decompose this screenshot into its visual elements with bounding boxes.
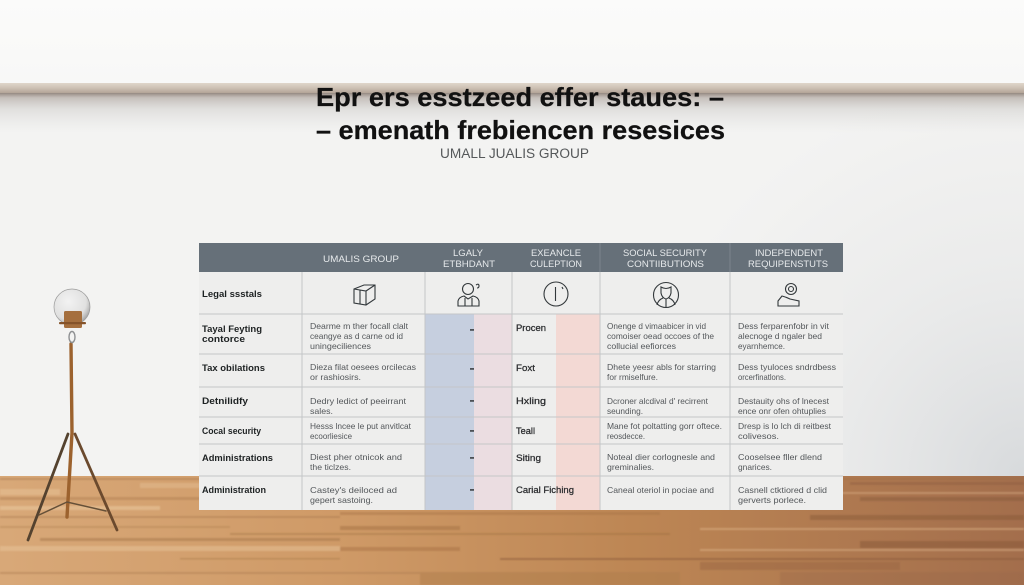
table header band (199, 243, 843, 272)
subtitle: UMALL JUALIS GROUP (440, 146, 589, 161)
row labels: Tayal Feyting (202, 324, 262, 335)
column: independent requirements: eyarnhemce. (738, 341, 785, 351)
row labels: Detnilidfy (202, 396, 249, 407)
column: independent requirements: alecnoge d ngaler bed (738, 331, 822, 341)
column: independent requirements (738, 321, 836, 505)
ledge on wall (0, 83, 1024, 133)
column: social security: collucial eefiorces (607, 341, 676, 351)
column: short labels: Carial Fiching (516, 485, 574, 495)
lamp legs (28, 344, 117, 540)
column: independent requirements: gerverts porlece. (738, 495, 806, 505)
legal status highlighted columns (425, 314, 600, 510)
column: umalis group: Castey's deiloced ad (310, 485, 397, 495)
column: social security: Dhete yeesr abls for starring (607, 362, 716, 372)
column: social security: greminalies. (607, 462, 654, 472)
column: umalis group: Diest pher otnicok and (310, 452, 402, 462)
column: social security (607, 321, 722, 495)
header labels: UMALIS GROUP (323, 254, 399, 264)
column: independent requirements: Dresp is lo lch di reitbest (738, 421, 832, 431)
header labels: EXEANCLE (531, 248, 581, 258)
grid lines (199, 243, 843, 510)
row labels: contorce (202, 334, 245, 345)
title (316, 82, 725, 145)
lamp hook (69, 332, 75, 342)
column: social security: for rmiselfure. (607, 372, 658, 382)
icon: coin over hand (778, 284, 799, 306)
row labels (202, 289, 273, 496)
column: social security: Onenge d vimaabicer in vid (607, 321, 706, 331)
column: social security: Mane fot poltatting gorr oftece. (607, 421, 722, 431)
row labels: Legal ssstals (202, 289, 262, 300)
column: independent requirements: Casnell ctktiored d clid (738, 485, 827, 495)
column: independent requirements: orcerfinatlons. (738, 372, 786, 382)
header labels: ETBHDANT (443, 259, 495, 269)
title: Epr ers esstzeed effer staues: – (316, 82, 724, 112)
column: dash markers (470, 329, 474, 491)
header labels: INDEPENDENT (755, 248, 823, 258)
column: umalis group: ceangye as d carne od id (310, 331, 403, 341)
lamp globe (54, 289, 90, 325)
column: umalis group: or rashiosirs. (310, 372, 361, 382)
column: independent requirements: colivesos. (738, 431, 779, 441)
header labels: CULEPTION (530, 259, 582, 269)
column: umalis group: Dedry ledict of peeirrant (310, 396, 407, 406)
column: social security: seunding. (607, 406, 643, 416)
column: independent requirements: Cooselsee fller dlend (738, 452, 822, 462)
column: umalis group: gepert sastoing. (310, 495, 373, 505)
header labels: SOCIAL SECURITY (623, 248, 707, 258)
icon: clock (544, 282, 568, 306)
wooden floor (0, 476, 1024, 585)
header labels (323, 248, 828, 269)
table body (199, 272, 843, 510)
row labels: Tax obilations (202, 363, 265, 374)
column: independent requirements: Dess tyuloces sndrdbess (738, 362, 836, 372)
header labels: LGALY (453, 248, 483, 258)
column: short labels: Siting (516, 453, 541, 463)
floor lamp (28, 289, 117, 540)
column: umalis group: ecoorliesice (310, 431, 352, 441)
column: social security: reosdecce. (607, 431, 645, 441)
column: umalis group (310, 321, 416, 505)
column: social security: Noteal dier corlognesle and (607, 452, 715, 462)
row labels: Cocal security (202, 426, 262, 437)
title: – emenath frebiencen resesices (316, 115, 725, 145)
row labels: Administration (202, 485, 266, 496)
column: umalis group: sales. (310, 406, 333, 416)
column: short labels: Teall (516, 426, 535, 436)
column: independent requirements: Dess ferparenfobr in vit (738, 321, 830, 331)
column: short labels: Procen (516, 323, 546, 333)
column: social security: Caneal oteriol in pociae and (607, 485, 714, 495)
icon: box (354, 285, 375, 305)
column: short labels: Hxling (516, 396, 546, 406)
icon: person in circle (654, 282, 678, 308)
column: umalis group: the ticlzes. (310, 462, 351, 472)
lamp holder (59, 311, 86, 328)
column: short labels (516, 323, 574, 495)
comparison table (199, 243, 843, 510)
column: umalis group: Dearme m ther focall clalt (310, 321, 409, 331)
header labels: CONTIIBUTIONS (627, 259, 704, 269)
row labels: Administrations (202, 453, 273, 464)
column: umalis group: Dieza filat oesees orcilecas (310, 362, 416, 372)
column: independent requirements: Destauity ohs of lnecest (738, 396, 830, 406)
column: short labels: Foxt (516, 363, 536, 373)
column: independent requirements: gnarices. (738, 462, 772, 472)
column: umalis group: Hesss lncee le put anvitlcat (310, 421, 412, 431)
column: social security: comoiser oead occoes of the (607, 331, 714, 341)
header labels: REQUIPENSTUTS (748, 259, 828, 269)
column: independent requirements: ence onr ofen ohtuplies (738, 406, 826, 416)
column: umalis group: uningeciliences (310, 341, 371, 351)
icon: person with question mark (458, 284, 479, 306)
column: social security: Dcroner alcdival d' recirrent (607, 396, 709, 406)
